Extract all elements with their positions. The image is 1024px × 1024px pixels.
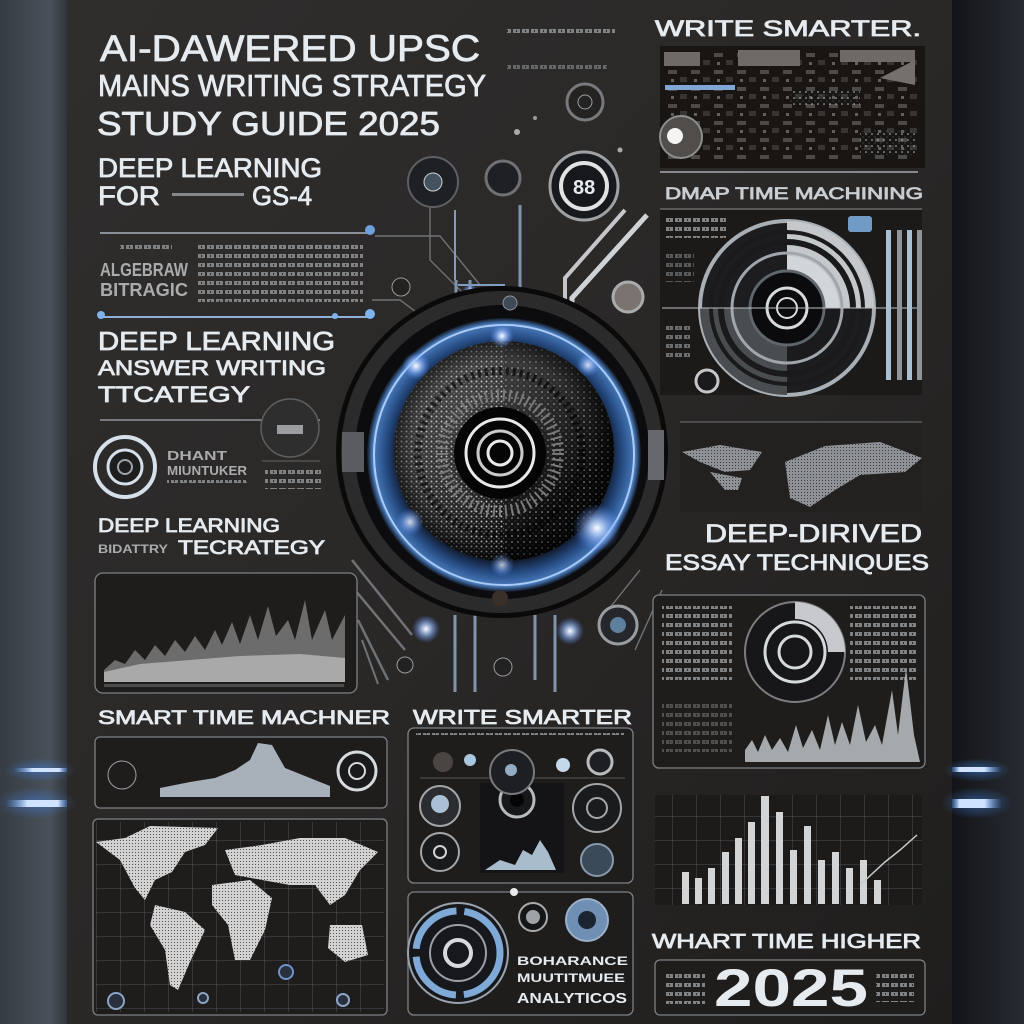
panel: 2025	[655, 959, 925, 1018]
text block: smart summary: MIUNTUKER	[167, 463, 248, 478]
panel: analytics dashboard	[653, 595, 925, 768]
heading: essay techniques: DEEP-DIRIVED	[705, 520, 922, 548]
circuit lines	[352, 190, 662, 692]
heading: answer writing strategy: DEEP LEARNING	[98, 326, 335, 356]
panel: collage	[660, 46, 925, 172]
heading: deep learning for GS-4: GS-4	[252, 181, 312, 211]
icon: target	[95, 437, 155, 497]
text block: smart summary	[167, 448, 321, 489]
bar chart	[655, 795, 922, 905]
heading: deep learning for GS-4: FOR	[98, 181, 160, 211]
top center small text	[507, 27, 615, 69]
panel: behaviour analytics: MUUTITMUEE	[517, 971, 625, 985]
central orb	[336, 286, 668, 618]
panel: area chart	[95, 573, 357, 693]
heading: higher: WHART TIME HIGHER	[652, 931, 921, 953]
heading: write smarter (center): WRITE SMARTER	[413, 707, 632, 729]
heading: answer writing strategy	[98, 326, 335, 407]
panel: text block: ALGEBRAW	[100, 260, 188, 280]
panel: text block: BITRAGIC	[100, 280, 188, 300]
main title: STUDY GUIDE 2025	[97, 105, 440, 142]
heading: deep learning for GS-4: DEEP LEARNING	[98, 153, 322, 183]
text block: smart summary: DHANT	[167, 448, 227, 463]
heading: deep learning for GS-4	[98, 153, 322, 211]
heading: write smarter (top right): WRITE SMARTER.	[655, 16, 921, 41]
panel: behaviour analytics	[408, 888, 633, 1015]
heading: deep learning strategy	[98, 516, 325, 559]
main title	[97, 28, 486, 142]
panel: text block	[97, 225, 375, 319]
panel: world map	[93, 819, 387, 1015]
panel: time chart	[95, 737, 387, 808]
main title: MAINS WRITING STRATEGY	[98, 68, 486, 103]
panel: behaviour analytics: ANALYTICOS	[517, 990, 627, 1007]
heading: answer writing strategy: TTCATEGY	[98, 382, 250, 407]
icon: dial	[261, 399, 319, 457]
panel: 2025: 2025	[714, 959, 868, 1018]
lower node glows	[397, 606, 637, 676]
panel: behaviour analytics: BOHARANCE	[517, 954, 628, 968]
side light beams	[0, 758, 1013, 819]
top node icons: 88	[573, 177, 595, 199]
panel: dials	[408, 728, 633, 883]
top node icons	[392, 84, 643, 312]
heading: deep learning strategy: BIDATTRY	[98, 542, 168, 556]
main title: AI-DAWERED UPSC	[100, 28, 480, 69]
heading: answer writing strategy: ANSWER WRITING	[98, 357, 326, 380]
heading: deep learning strategy: DEEP LEARNING	[98, 516, 280, 537]
heading: essay techniques	[665, 520, 929, 575]
panel: radial chart	[660, 209, 922, 395]
heading: map time machining: DMAP TIME MACHINING	[665, 184, 923, 203]
heading: deep learning strategy: TECRATEGY	[178, 538, 325, 559]
panel: map strip	[680, 422, 922, 512]
heading: essay techniques: ESSAY TECHNIQUES	[665, 550, 929, 575]
heading: smart time machine: SMART TIME MACHNER	[98, 708, 390, 729]
divider line with dial	[100, 419, 320, 421]
